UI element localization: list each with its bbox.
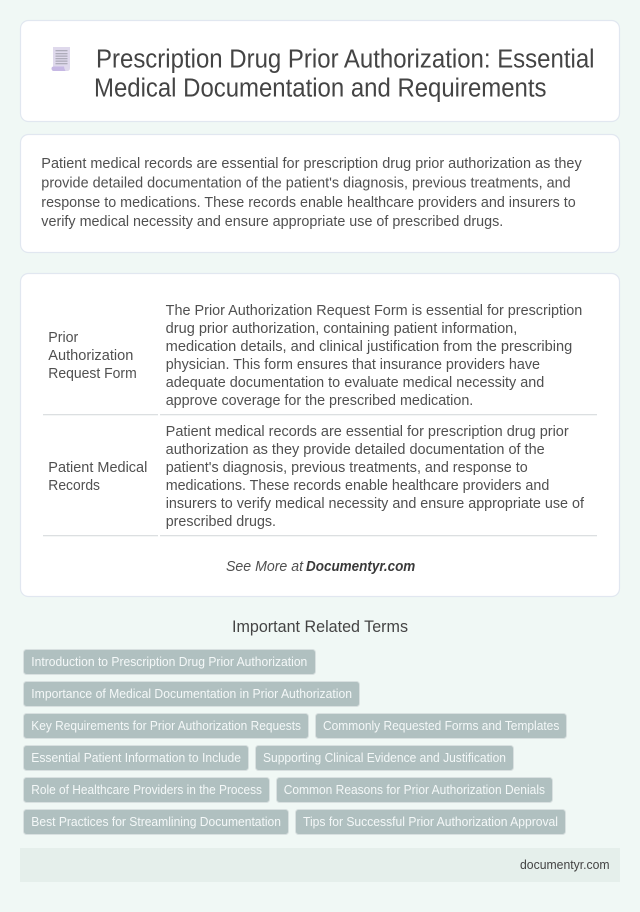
tag	[316, 714, 566, 738]
row description: adequate documentation to evaluate medical necessity and	[166, 375, 544, 391]
row label: Prior	[48, 330, 78, 346]
intro text	[41, 156, 582, 230]
row description: medication details, and clinical justification from the prescribing	[166, 339, 572, 355]
title: Prescription Drug Prior Authorization: Essential	[96, 46, 594, 74]
tag	[24, 746, 248, 770]
tag: Common Reasons for Prior Authorization Denials	[284, 783, 545, 797]
panel: introduction	[20, 134, 620, 252]
tag: Role of Healthcare Providers in the Process	[31, 783, 262, 797]
tag	[24, 682, 360, 706]
row label: Authorization	[48, 348, 133, 364]
tag	[256, 746, 514, 770]
row description: physician. This form ensures that insurance providers have	[166, 357, 540, 373]
row label: Records	[48, 478, 100, 494]
row description	[166, 303, 582, 409]
row label	[48, 460, 147, 494]
row label: Request Form	[48, 366, 137, 382]
tag: Supporting Clinical Evidence and Justification	[263, 751, 506, 765]
row description: prescribed drugs.	[166, 514, 276, 530]
tag	[24, 778, 270, 802]
row: prior authorization request form	[48, 303, 582, 409]
tag	[296, 810, 566, 834]
heading: related terms: Important Related Terms	[232, 618, 408, 636]
row description: medications. These records enable healthcare providers and	[166, 478, 549, 494]
see more link	[226, 559, 415, 575]
intro text: provide detailed documentation of the patient's diagnosis, previous treatments, and	[41, 175, 571, 191]
tag	[276, 778, 552, 802]
row description: approve coverage for the prescribed medication.	[166, 393, 473, 409]
intro text: verify medical necessity and ensure appropriate use of prescribed drugs.	[41, 214, 503, 230]
row description: insurers to verify medical necessity and ensure appropriate use of	[166, 496, 585, 512]
tag: Importance of Medical Documentation in Prior Authorization	[31, 687, 352, 701]
tag	[24, 714, 308, 738]
see more link: Documentyr.com	[306, 559, 415, 575]
intro text: Patient medical records are essential for prescription drug prior authorization as they	[41, 156, 582, 172]
panel: header	[20, 20, 620, 122]
title: Medical Documentation and Requirements	[94, 74, 546, 102]
tag: Commonly Requested Forms and Templates	[323, 719, 559, 733]
see more link: See More at	[226, 559, 304, 575]
row label	[48, 330, 137, 382]
title	[94, 46, 594, 102]
tag: Tips for Successful Prior Authorization Approval	[303, 815, 558, 829]
tag: Best Practices for Streamlining Documentation	[31, 815, 281, 829]
row: patient medical records	[48, 424, 585, 530]
row description: The Prior Authorization Request Form is essential for prescription	[166, 303, 582, 319]
row description: patient's diagnosis, previous treatments, and response to	[166, 460, 528, 476]
tag: Introduction to Prescription Drug Prior Authorization	[31, 655, 307, 669]
tag: Essential Patient Information to Include	[31, 751, 241, 765]
tag: Key Requirements for Prior Authorization Requests	[31, 719, 301, 733]
tag	[24, 810, 288, 834]
row label: Patient Medical	[48, 460, 147, 476]
row description: drug prior authorization, containing patient information,	[166, 321, 517, 337]
tag	[24, 650, 316, 674]
row description: Patient medical records are essential for prescription drug prior	[166, 424, 569, 440]
row description: authorization as they provide detailed documentation of the	[166, 442, 545, 458]
panel: related term tags	[24, 650, 566, 834]
footer	[20, 848, 620, 882]
panel: documents table	[20, 274, 620, 596]
row description	[166, 424, 585, 530]
icon: prescription scroll	[52, 47, 70, 71]
intro text: response to medications. These records enable healthcare providers and insurers to	[41, 195, 576, 211]
footer brand: documentyr.com	[520, 858, 610, 872]
